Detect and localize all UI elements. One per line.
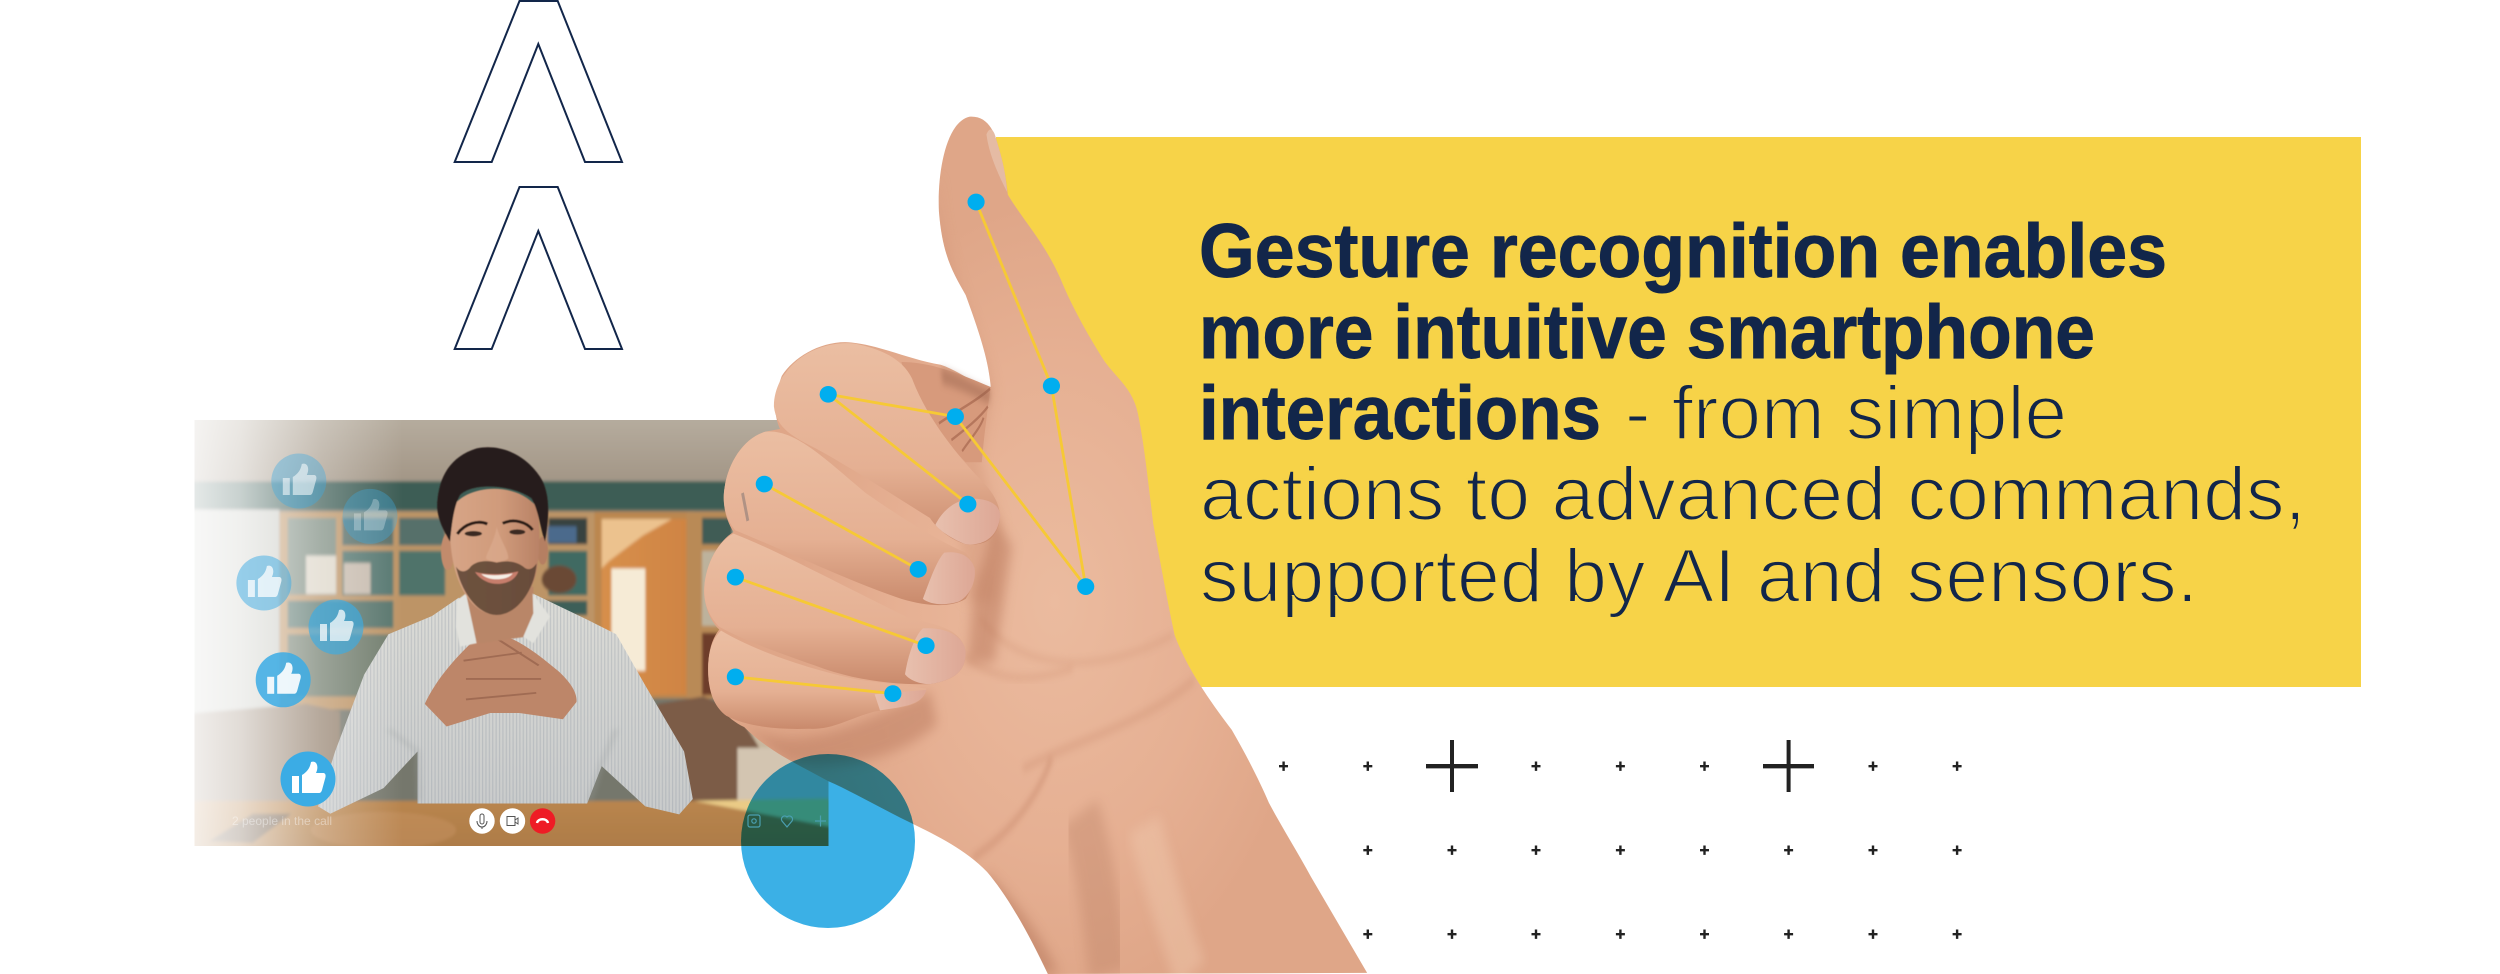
- teeth: [481, 573, 513, 579]
- plus grid: [1279, 740, 1962, 939]
- bold line 3: interactions: [1199, 371, 1601, 456]
- clasped hands: [425, 633, 577, 727]
- reaction badge 6 solid: [280, 752, 336, 806]
- brows: [457, 521, 533, 534]
- index nail: [935, 499, 1000, 544]
- big plus 1: [1426, 740, 1478, 792]
- mouth: [475, 571, 518, 584]
- shadow under fingers: [744, 691, 937, 765]
- light line 4: actions to advanced commands,: [1200, 452, 2306, 537]
- scan icon: [748, 815, 760, 827]
- ring nail: [905, 628, 966, 684]
- video call photo illustration: [194, 420, 828, 846]
- reaction badge 5: [256, 652, 311, 707]
- heading text: [1199, 209, 2306, 619]
- fold upper shadow: [941, 368, 991, 404]
- microphone button: [469, 808, 495, 834]
- middle finger: [724, 431, 975, 605]
- eyes: [465, 531, 482, 536]
- big plus 2: [1763, 740, 1814, 792]
- doorway: [594, 512, 694, 698]
- middle nail: [923, 552, 975, 604]
- caption: 2 people in the call: [232, 814, 332, 828]
- bookshelf right: [692, 509, 733, 700]
- ears: [441, 533, 454, 570]
- index finger: [774, 343, 1000, 545]
- shirt fold shading: [388, 729, 616, 801]
- hang up button: [530, 808, 555, 834]
- pinky finger: [708, 631, 926, 729]
- reaction badge 1: [271, 454, 326, 508]
- landmark lines: [735, 202, 1086, 694]
- ring finger: [704, 534, 966, 684]
- reaction badge 4: [308, 600, 364, 654]
- plus icon: [815, 816, 826, 826]
- shadow beside fingertips: [966, 501, 1012, 663]
- shirt stripes: [318, 594, 693, 814]
- fold creases: [939, 389, 990, 451]
- face skin: [450, 489, 539, 615]
- hair: [437, 447, 548, 542]
- chevrons outline: [455, 1, 622, 349]
- sofa left: [204, 704, 340, 800]
- yellow text panel: [996, 137, 2361, 687]
- left fade: [194, 420, 391, 846]
- reaction badge 2: [342, 489, 398, 544]
- table: [194, 797, 828, 846]
- camera button: [500, 808, 525, 834]
- finger creases: [464, 634, 541, 699]
- landmark dots: [727, 194, 1094, 702]
- call controls: [469, 808, 555, 834]
- thumb nail: [986, 130, 1007, 192]
- pinky nail: [875, 690, 926, 710]
- blue multiply circle: [741, 754, 915, 928]
- right backdrop: [730, 526, 772, 750]
- shirt: [318, 594, 693, 814]
- bold line 1: Gesture recognition enables: [1199, 209, 2167, 294]
- hand with gesture landmarks: [704, 117, 1367, 974]
- finger fold behind index: [901, 362, 991, 462]
- man body: [318, 594, 693, 814]
- man head: [437, 447, 550, 647]
- circle overlay icons: [748, 815, 826, 827]
- sofa right: [657, 697, 759, 801]
- neck: [463, 587, 534, 643]
- bookshelf left: [279, 512, 594, 709]
- room background: [194, 420, 828, 846]
- beard: [456, 561, 537, 615]
- small plus marks: [1279, 762, 1962, 939]
- reaction badge 3: [236, 556, 291, 610]
- collar: [456, 593, 550, 647]
- light line 3: - from simple: [1625, 371, 2067, 456]
- heart icon: [781, 816, 793, 827]
- hand shading: [744, 172, 1194, 974]
- nose: [486, 530, 508, 562]
- chevron top: [455, 1, 622, 162]
- bold line 2: more intuitive smartphone: [1199, 290, 2095, 375]
- light line 5: supported by AI and sensors.: [1200, 534, 2198, 619]
- hand base silhouette: [704, 117, 1367, 974]
- bruise: [742, 493, 748, 521]
- chevron bottom: [455, 187, 622, 349]
